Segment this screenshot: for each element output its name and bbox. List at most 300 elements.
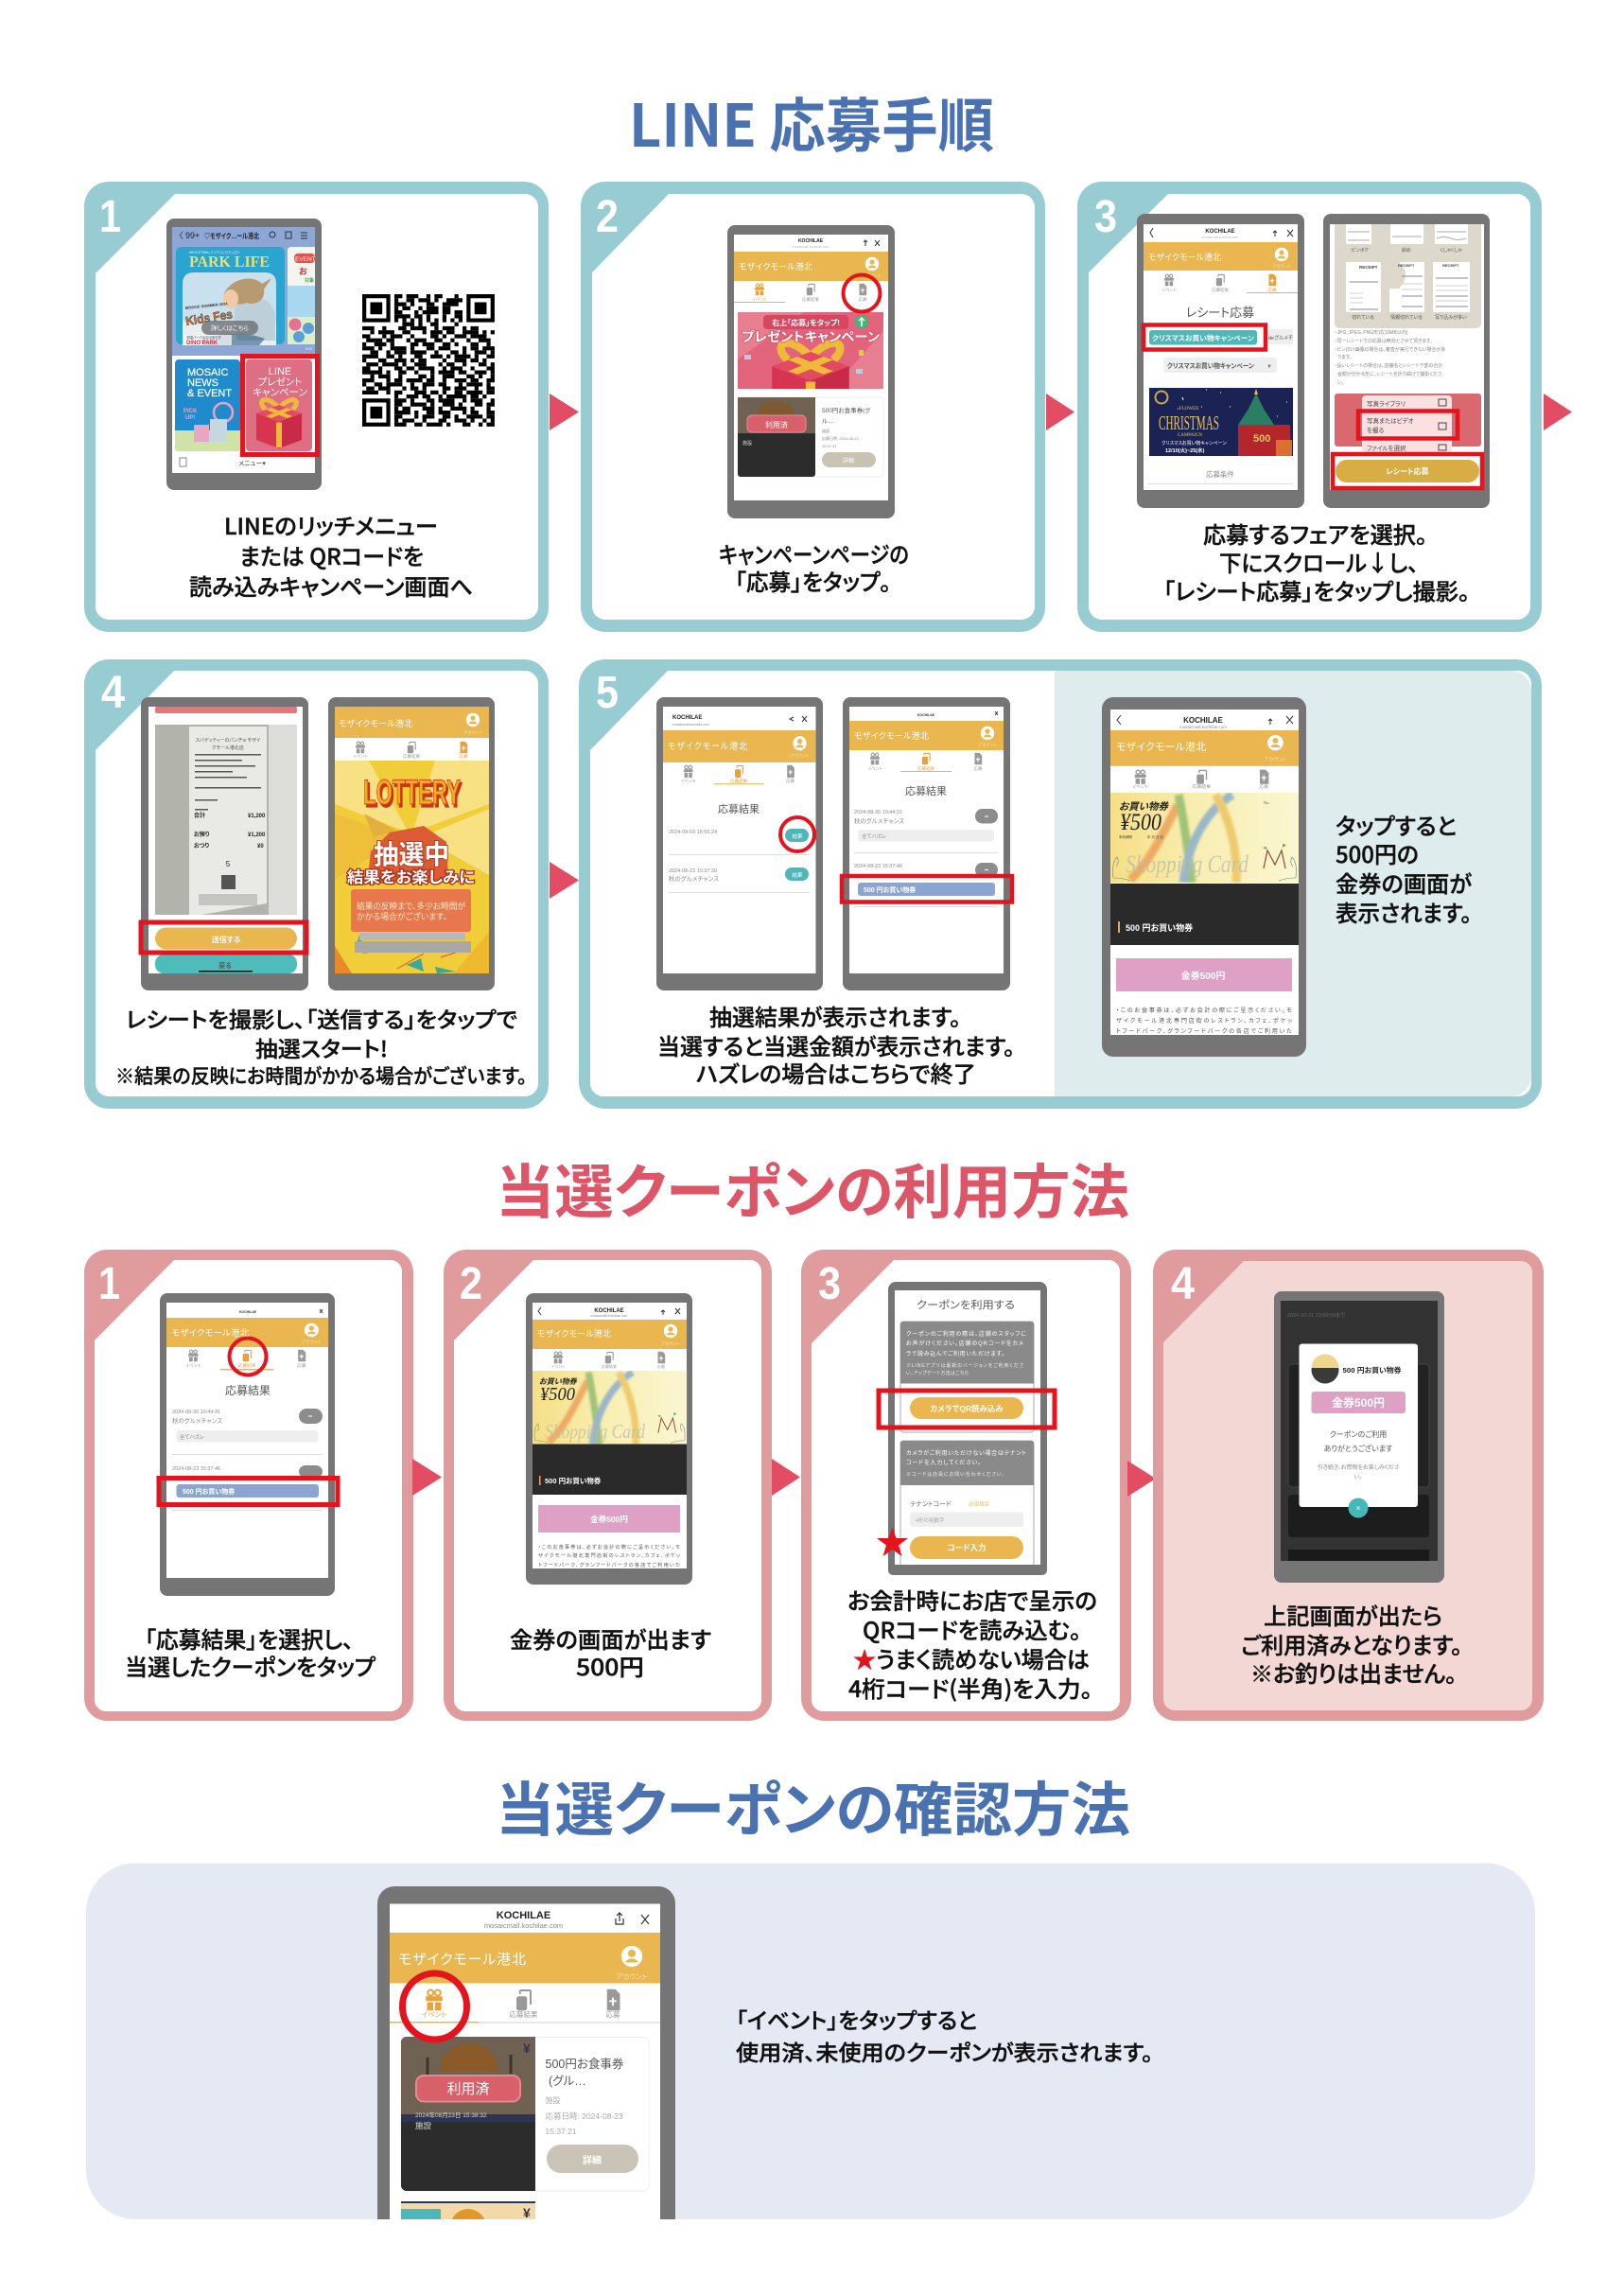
- phone: scroll and shoot receipt: 写り込みが多い: [1435, 314, 1467, 321]
- phone: LINE rich menu: PARK LIFE: [189, 253, 270, 271]
- panel: step 5: [579, 659, 1542, 1109]
- panel: coupon step 2: [444, 1250, 772, 1721]
- description text: 「イベント」をタップすると: [736, 2003, 977, 2035]
- callout text: 500円の: [1336, 836, 1419, 869]
- phone: select result: 2024-08-30 10:44:21: [172, 1410, 220, 1415]
- phone: event tab: [377, 1886, 675, 2245]
- phone: LINE rich menu: & EVENT: [187, 388, 232, 399]
- phone: lottery screen: [328, 697, 495, 990]
- highlight: red rectangle: [1358, 411, 1458, 439]
- caption: [719, 536, 909, 597]
- coupon card: 詳細: [583, 2154, 602, 2166]
- phone: LINE rich menu: 対象: [305, 277, 314, 284]
- modal: ×: [1356, 1504, 1361, 1513]
- phone: select fair: クリスマスお買い物キャンペーン: [1167, 361, 1254, 370]
- caption: 下にスクロール↓し、: [1219, 545, 1419, 578]
- phone: select fair: 応募: [1267, 287, 1277, 293]
- phone: receipt photo: 送信する: [212, 935, 241, 944]
- phone: LINE rich menu: Kids Fes: [184, 307, 234, 328]
- voucher image: お買い物券: [539, 1377, 578, 1386]
- next coupon card: [401, 2201, 535, 2219]
- title: 当選クーポンの利用方法: 当選クーポンの利用方法: [496, 1145, 1129, 1230]
- phone: voucher screen: KOCHILAE: [594, 1308, 624, 1314]
- phone: receipt photo: おつり: [194, 842, 209, 850]
- caption: QRコードを読み込む。: [863, 1612, 1081, 1645]
- caption: 金券の画面が出ます: [510, 1621, 711, 1655]
- phone: select result: 全てハズレ: [180, 1433, 204, 1441]
- phone: scroll and shoot receipt: 写真ライブラリ: [1367, 399, 1406, 408]
- christmas banner: FLOWER: [1179, 407, 1199, 412]
- phone: use coupon: クーポンを利用する: [917, 1299, 1015, 1311]
- phone: scroll and shoot receipt: 情報切れている: [1390, 314, 1423, 321]
- phone: lottery screen: 抽選中: [374, 840, 449, 869]
- phone: select result: イベント: [185, 1363, 201, 1368]
- phone: voucher screen: 応募結果: [602, 1363, 617, 1369]
- phone: select result: KOCHILAE: [239, 1310, 257, 1314]
- phone: select fair: クリスマスお買い物キャンペーン: [1152, 333, 1255, 342]
- phone: campaign page: 右上「応募」をタップ!: [772, 318, 840, 327]
- phone: result list: [656, 697, 823, 990]
- phone: prize result: 秋のグルメチャンス: [854, 816, 904, 825]
- voucher image: Shopping Card: [1126, 850, 1249, 878]
- modal: クーポンのご利用: [1329, 1429, 1387, 1439]
- voucher image: No.: [1264, 800, 1270, 805]
- step number 2: 2: [460, 1259, 482, 1309]
- phone: voucher screen: ・このお食事券は、必ずお会計の際にご呈示ください。モ: [1116, 1007, 1292, 1014]
- voucher image: [1110, 793, 1299, 883]
- phone: voucher screen: イベント: [551, 1364, 565, 1369]
- highlight: red circle: [844, 274, 880, 312]
- phone: voucher screen: 金券500円: [1181, 970, 1225, 982]
- phone: campaign page: 応募: [859, 296, 867, 303]
- phone: prize result: イベント: [867, 766, 882, 771]
- phone: scroll and shoot receipt: RECEIPT: [1442, 263, 1459, 268]
- phone: result list: 2024-08-23 15:37:20: [669, 868, 717, 874]
- phone: LINE rich menu: UP!: [185, 415, 195, 421]
- voucher image: お買い物券: [1119, 801, 1170, 813]
- caption: 抽選結果が表示されます。: [709, 999, 961, 1032]
- phone: receipt photo: 戻る: [218, 962, 232, 970]
- phone: lottery screen: LOTTERY: [365, 776, 463, 815]
- caption: お会計時にお店で呈示の: [847, 1583, 1097, 1616]
- step number 3: 3: [818, 1259, 841, 1309]
- phone: scroll and shoot receipt: ・長いレシートの場合は、店舗名とレシート下部の合計: [1335, 362, 1442, 369]
- caption: [1163, 517, 1470, 606]
- phone: prize result: 全てハズレ: [862, 832, 886, 840]
- phone: select result: アカウント: [302, 1339, 322, 1345]
- phone: select fair: 応募結果: [1212, 287, 1229, 293]
- phone: receipt photo: 5: [226, 860, 231, 868]
- step number 4: 4: [101, 668, 125, 718]
- panel: coupon check: [86, 1864, 1535, 2245]
- christmas banner: 12/10(火)~25(水): [1165, 447, 1205, 454]
- phone: use coupon: ※コードは店員にお問い合わせください。: [906, 1471, 1004, 1478]
- phone: result list: mosaicmall.kochilae.com: [672, 723, 709, 727]
- phone: campaign page: アカウント: [863, 272, 882, 279]
- phone: prize result: アカウント: [978, 742, 997, 748]
- phone: prize result: 2024-08-30 10:44:21: [854, 810, 902, 815]
- caption: [657, 999, 1015, 1089]
- highlight: red circle: [780, 817, 814, 851]
- coupon card: 利用済: [446, 2081, 490, 2097]
- phone: LINE rich menu: NEWS: [187, 377, 218, 389]
- coupon card: 応募日時: 2024-08-23: [545, 2111, 623, 2121]
- caption: [847, 1583, 1097, 1704]
- coupon card: ¥: [523, 2041, 531, 2056]
- caption: または QRコードを: [239, 538, 424, 571]
- highlight: red rectangle: [1144, 325, 1266, 350]
- coupon card: 500円お食事券: [545, 2057, 624, 2071]
- phone: select fair: [1137, 214, 1304, 508]
- caption: 当選すると当選金額が表示されます。: [657, 1028, 1015, 1061]
- phone: lottery screen: LOTTERY: [363, 773, 461, 812]
- phone: prize result: モザイクモール港北: [854, 730, 929, 741]
- phone: campaign page: 500円お食事券(グ: [822, 406, 871, 414]
- highlight: red rectangle: [159, 1478, 338, 1504]
- voucher image: Shopping Card: [545, 1420, 645, 1443]
- phone: receipt photo: クモール港北店: [212, 745, 244, 751]
- panel: coupon step 1: [84, 1250, 413, 1721]
- phone: lottery screen: かかる場合がございます。: [357, 911, 447, 921]
- phone: campaign page: 施設: [742, 440, 752, 447]
- modal: い。: [1354, 1474, 1362, 1480]
- phone: prize result: 応募: [974, 765, 983, 772]
- step number 1: 1: [98, 1259, 120, 1309]
- phone: voucher screen: mosaicmall.kochilae.com: [591, 1314, 628, 1318]
- phone: result list: 結果: [792, 871, 803, 879]
- caption: ※お釣りは出ません。: [1250, 1656, 1457, 1689]
- phone: voucher screen: 応募: [657, 1363, 665, 1369]
- phone: prize result: 応募結果: [905, 785, 947, 797]
- phone: event tab: 応募結果: [509, 2009, 538, 2019]
- phone: prize result: 500 円お買い物券: [864, 885, 916, 894]
- phone: voucher screen: 500 円お買い物券: [545, 1476, 602, 1485]
- gift banner art: [772, 339, 849, 389]
- phone: LINE rich menu: 〈 99+: [179, 231, 200, 240]
- phone: LINE rich menu: DINO PARK: [186, 341, 218, 346]
- caption: 読み込みキャンペーン画面へ: [189, 569, 473, 602]
- coupon card: 15:37:21: [545, 2127, 577, 2136]
- phone: use coupon: コードを入力してください。: [906, 1459, 981, 1466]
- phone: use coupon: コード入力: [947, 1543, 987, 1552]
- phone: use coupon: ラで読み込んでご利用いただけます。: [906, 1350, 1004, 1358]
- caption: [510, 1621, 711, 1682]
- christmas banner: CAMPAIGN: [1178, 433, 1202, 438]
- phone: LINE rich menu: メニュー▾: [238, 461, 266, 467]
- highlight: red rectangle: [141, 922, 306, 953]
- step number 2: 2: [596, 192, 619, 242]
- phone: receipt photo: [141, 697, 308, 990]
- phone: voucher screen: [1102, 697, 1306, 1057]
- phone: use coupon: クーポンのご利用の際は、店舗のスタッフに: [906, 1330, 1026, 1338]
- phone: select fair: deグルメチ: [1268, 334, 1293, 342]
- phone: receipt photo: ¥1,200: [248, 832, 266, 838]
- QR code: [362, 296, 495, 425]
- phone: campaign page: KOCHILAE: [798, 238, 824, 244]
- phone: event tab: KOCHILAE: [497, 1910, 550, 1921]
- phone: LINE rich menu: MOSAIC SUMMER 2024: [185, 301, 229, 310]
- phone: receipt photo: ¥0: [257, 844, 264, 850]
- phone: result list: イベント: [681, 779, 696, 783]
- arrow: [550, 394, 579, 430]
- phone: scroll and shoot receipt: ・同一レシートでの応募は無効とさせて頂きます。: [1335, 338, 1433, 344]
- caption: [1241, 1598, 1462, 1689]
- phone: LINE rich menu: LINE: [269, 366, 291, 377]
- coupon card: (グル…: [549, 2075, 586, 2088]
- highlight: red rectangle: [842, 876, 1012, 902]
- phone: receipt photo: ¥1,200: [248, 814, 266, 819]
- description text: 使用済、未使用のクーポンが表示されます。: [736, 2035, 1153, 2067]
- phone: voucher screen: モザイクモール港北: [537, 1328, 611, 1339]
- phone: LINE rich menu: [166, 219, 322, 490]
- phone: voucher screen: [526, 1293, 692, 1585]
- voucher image: [533, 1371, 687, 1445]
- phone: campaign page: 施設: [822, 428, 829, 433]
- arrow: [1127, 1461, 1156, 1497]
- panel: step 3: [1077, 182, 1542, 632]
- step number 3: 3: [1094, 192, 1117, 242]
- phone: use coupon: カメラがご利用いただけない場合はテナント: [906, 1449, 1026, 1457]
- phone: result list: 応募: [786, 778, 795, 784]
- phone: select fair: ▼: [1266, 364, 1272, 370]
- caption: ご利用済みとなります。: [1241, 1627, 1462, 1660]
- phone: scroll and shoot receipt: 切れている: [1352, 314, 1374, 321]
- modal: 金券500円: [1332, 1395, 1385, 1410]
- caption: 500円: [576, 1649, 644, 1682]
- arrow: [412, 1459, 442, 1496]
- coupon card: [401, 2037, 649, 2191]
- voucher image: 有効期限: [1119, 834, 1133, 839]
- phone: select fair: モザイクモール港北: [1148, 252, 1221, 262]
- panel: step 2: [581, 182, 1045, 632]
- description text: [736, 2003, 1153, 2067]
- callout text: [1336, 808, 1472, 928]
- caption: 「応募」をタップ。: [735, 564, 891, 597]
- phone: campaign page: 応募日時: 2024-08-23: [822, 435, 859, 441]
- phone: campaign page: プレゼントキャンペーン: [742, 329, 881, 344]
- icon: red star: [877, 1527, 908, 1556]
- arrow: [1544, 394, 1572, 430]
- title: 当選クーポンの確認方法: 当選クーポンの確認方法: [496, 1762, 1130, 1848]
- phone: campaign page: mosaicmall.kochilae.com: [793, 245, 829, 249]
- phone: scroll and shoot receipt: 斜め: [1402, 247, 1411, 254]
- phone: scroll and shoot receipt: RECEIPT: [1398, 263, 1415, 268]
- modal: 500 円お買い物券: [1343, 1365, 1402, 1375]
- caption: 抽選スタート!: [255, 1031, 388, 1063]
- caption: ハズレの場合はこちらで終了: [696, 1056, 976, 1089]
- arrow: [550, 862, 579, 899]
- phone: use coupon: い。アップデート方法はこちら: [906, 1370, 969, 1376]
- voucher image: ¥500: [540, 1384, 575, 1405]
- phone: voucher screen: 応募結果: [1193, 783, 1211, 790]
- phone: select result: 2024-08-23 15:37:46: [172, 1466, 220, 1472]
- phone: select result: 応募結果: [238, 1362, 256, 1369]
- step number 1: 1: [99, 192, 121, 242]
- phone: LINE rich menu: #ROCKTBB#、ドリアンにせたいだ!!: [189, 250, 239, 254]
- caption: [189, 508, 473, 602]
- phone: voucher screen: 500 円お買い物券: [1126, 922, 1193, 933]
- caption: ※結果の反映にお時間がかかる場合がございます。: [115, 1061, 527, 1090]
- phone: scroll and shoot receipt: くしゃくしゃ: [1440, 248, 1462, 254]
- caption: LINEのリッチメニュー: [224, 508, 438, 541]
- phone: campaign page: ル…: [822, 418, 834, 425]
- phone: LINE rich menu: お: [299, 267, 307, 276]
- christmas banner: CHRISTMAS: [1159, 412, 1219, 434]
- phone: scroll and shoot receipt: [1323, 214, 1490, 508]
- phone: scroll and shoot receipt: 写真またはビデオ: [1367, 416, 1414, 425]
- phone: select result: 応募結果: [225, 1384, 271, 1397]
- phone: receipt photo: お預り: [194, 831, 210, 838]
- phone: voucher screen: トフードパーク、グランフードパークの各店でご利用いた: [538, 1561, 680, 1568]
- panel: coupon step 4: [1153, 1250, 1544, 1721]
- phone: LINE rich menu: EVENT: [295, 256, 316, 263]
- step number 5: 5: [596, 668, 619, 718]
- phone: lottery screen: 結果の反映まで、多少お時間が: [357, 901, 465, 911]
- phone: scroll and shoot receipt: を撮る: [1367, 426, 1384, 434]
- phone: voucher screen: ザイクモール港北専門店街のレストラン、カフェ、ポケッ: [1116, 1017, 1292, 1025]
- voucher image: 年 月 日 迄: [1147, 834, 1163, 839]
- panel: coupon step 3: [801, 1250, 1131, 1721]
- caption: [115, 1002, 527, 1090]
- phone: campaign page: 利用済: [765, 420, 788, 429]
- phone: campaign page: モザイクモール港北: [739, 261, 812, 272]
- phone: select result: 秋のグルメチャンス: [172, 1416, 222, 1425]
- phone: voucher screen: アカウント: [661, 1340, 680, 1347]
- phone: voucher screen: 金券500円: [590, 1515, 628, 1524]
- phone: LINE rich menu: PICK: [183, 409, 198, 414]
- christmas banner: 500: [1253, 433, 1270, 445]
- phone: scroll and shoot receipt: い。: [1337, 380, 1344, 386]
- phone: select fair: アカウント: [1272, 263, 1291, 270]
- callout text: タップすると: [1336, 808, 1457, 841]
- phone: select fair: mosaicmall.kochilae.com: [1202, 236, 1239, 239]
- phone: select result: 500 円お買い物券: [183, 1487, 235, 1496]
- phone: prize result: 2024-08-23 15:37:46: [854, 864, 902, 869]
- phone: scroll and shoot receipt: ・ピンぼけ画像の場合は、審査が実行できない場合があ: [1335, 346, 1445, 353]
- phone: event tab: アカウント: [616, 1972, 648, 1981]
- caption: 4桁コード(半角)を入力。: [848, 1671, 1092, 1704]
- phone: use coupon: お声がけください。店舗のQRコードをカメ: [906, 1340, 1023, 1347]
- coupon card: 施設: [545, 2095, 560, 2105]
- step number 4: 4: [1171, 1259, 1195, 1309]
- modal: ありがとうございます: [1324, 1444, 1393, 1453]
- phone: lottery screen: イベント: [353, 754, 368, 759]
- arrow: [1046, 394, 1074, 430]
- phone: voucher screen: KOCHILAE: [1183, 716, 1224, 725]
- phone: scroll and shoot receipt: RECEIPT: [1359, 265, 1378, 270]
- phone: result list: KOCHILAE: [672, 715, 702, 721]
- phone: campaign page: 応募結果: [802, 296, 819, 303]
- panel: step 4: [84, 659, 549, 1109]
- phone: scroll and shoot receipt: 金額が分かる形に、レシートを折り曲げて撮影くださ: [1337, 371, 1442, 377]
- callout text: 表示されます。: [1336, 895, 1472, 928]
- coupon card: 2024年08月23日 15:38:32: [415, 2111, 487, 2119]
- phone: voucher screen: mosaicmall.kochilae.com: [1179, 725, 1227, 729]
- phone: voucher screen: トフードパーク、グランフードパークの各店でご利用いた: [1116, 1027, 1292, 1035]
- caption: [125, 1621, 375, 1682]
- phone: lottery screen: 結果をお楽しみに: [347, 868, 475, 886]
- highlight: red rectangle: [1333, 454, 1482, 488]
- phone: receipt photo: スパゲッティーのパンチョ モザイ: [195, 737, 261, 744]
- phone: campaign page: [727, 225, 895, 518]
- phone: event tab: mosaicmall.kochilae.com: [484, 1921, 563, 1930]
- caption: ★うまく読めない場合は: [853, 1641, 1090, 1674]
- phone: result list: モザイクモール港北: [668, 741, 747, 751]
- phone: result list: 応募結果: [718, 803, 760, 815]
- highlight: red circle: [403, 1973, 467, 2040]
- phone: lottery screen: 応募結果: [403, 753, 420, 760]
- phone: result list: 秋のグルメチャンス: [669, 874, 719, 883]
- phone: use coupon: [877, 1282, 1055, 1575]
- caption: 当選したクーポンをタップ: [125, 1649, 375, 1682]
- phone: result list: 応募結果: [730, 778, 747, 784]
- phone: lottery screen: アカウント: [463, 729, 482, 736]
- phone: event tab: モザイクモール港北: [398, 1952, 526, 1968]
- phone: voucher screen: アカウント: [1264, 755, 1287, 762]
- phone: select result: 応募: [297, 1362, 306, 1369]
- phone: use coupon: ※LINEアプリは最新のバージョンをご利用くださ: [906, 1362, 1023, 1369]
- coupon card: 施設: [415, 2121, 432, 2130]
- phone: prize result: [842, 697, 1012, 990]
- phone: lottery screen: モザイクモール港北: [339, 718, 412, 728]
- phone: scroll and shoot receipt: ります。: [1337, 355, 1352, 360]
- modal: 引き続き、お買物をお楽しみくださ: [1318, 1463, 1400, 1471]
- phone: LINE rich menu: ♡モザイク…ール港北: [204, 231, 259, 240]
- voucher image: ¥500: [1120, 810, 1161, 835]
- callout text: 金券の画面が: [1336, 866, 1472, 899]
- phone: result list: 結果: [792, 832, 803, 840]
- caption: 応募するフェアを選択。: [1203, 517, 1427, 550]
- tinted result area: [1055, 671, 1531, 1096]
- phone: scroll and shoot receipt: ファイルを選択: [1367, 444, 1406, 452]
- phone: scroll and shoot receipt: ピンボケ: [1352, 247, 1370, 254]
- caption: キャンペーンページの: [719, 536, 909, 569]
- phone: LINE rich menu: MOSAIC: [187, 367, 228, 378]
- phone: result list: 2024-09-03 16:56:24: [669, 830, 717, 835]
- panel: step 1: [84, 182, 549, 632]
- phone: LINE rich menu: 5:30: [306, 347, 312, 351]
- phone: voucher screen: 応募: [1259, 783, 1268, 790]
- highlight: red circle: [229, 1338, 267, 1375]
- phone: used modal: [1274, 1291, 1444, 1583]
- phone: voucher screen: ・このお食事券は、必ずお会計の際にご呈示ください。モ: [538, 1543, 680, 1550]
- phone: LINE rich menu: プレゼント: [258, 377, 302, 388]
- phone: use coupon: カメラでQR読み込み: [930, 1404, 1004, 1413]
- phone: use coupon: 必須項目: [969, 1500, 989, 1508]
- caption: 「応募結果」を選択し、: [145, 1621, 354, 1655]
- caption: 上記画面が出たら: [1264, 1598, 1442, 1631]
- phone: campaign page: 詳細: [843, 457, 854, 464]
- phone: select result: モザイクモール港北: [171, 1327, 249, 1338]
- phone: select fair: レシート応募: [1186, 306, 1254, 320]
- modal: [1300, 1343, 1418, 1517]
- phone: select result: [159, 1293, 338, 1596]
- phone: event tab: 応募: [605, 2009, 620, 2019]
- phone: LINE rich menu: 茶園パークの中で中です: [186, 335, 222, 340]
- phone: event tab: イベント: [421, 2010, 446, 2019]
- phone: used modal: 2024-10-31 23:59:59まで: [1287, 1312, 1346, 1319]
- phone: select fair: イベント: [1161, 288, 1177, 292]
- phone: LINE rich menu: キャンペーン: [253, 387, 307, 398]
- phone: select fair: KOCHILAE: [1205, 229, 1235, 235]
- phone: voucher screen: ザイクモール港北専門店街のレストラン、カフェ、ポケッ: [538, 1551, 680, 1559]
- phone: campaign page: 15:37:47: [822, 444, 837, 448]
- arrow: [772, 1459, 800, 1496]
- phone: prize result: KOCHILAE: [917, 713, 935, 717]
- phone: voucher screen: モザイクモール港北: [1116, 741, 1206, 753]
- christmas banner: クリスマスお買い物キャンペーン: [1161, 440, 1227, 447]
- caption: レシートを撮影し、「送信する」をタップで: [126, 1002, 517, 1034]
